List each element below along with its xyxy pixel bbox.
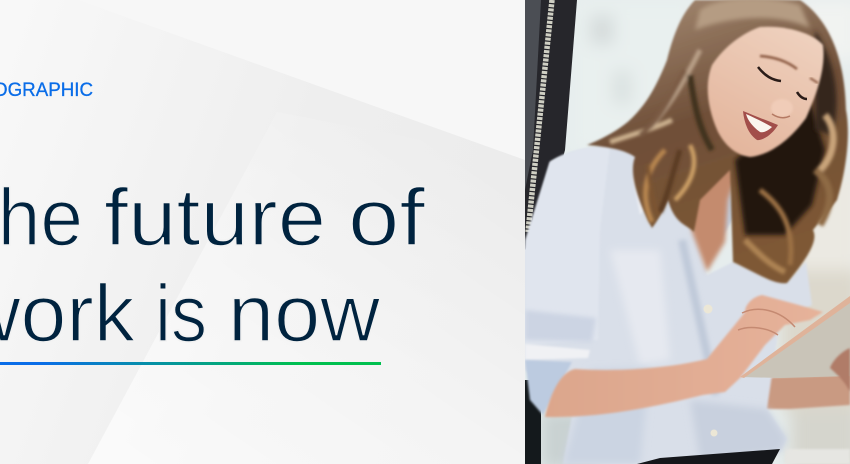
- shirt buttons: [704, 304, 718, 436]
- hair: [587, 0, 848, 283]
- background panel: [0, 0, 525, 464]
- title: [0, 173, 426, 359]
- face: [708, 27, 824, 157]
- title: is: [155, 269, 207, 359]
- title: future: [104, 173, 326, 263]
- back arm: [757, 375, 850, 409]
- tablet: [740, 296, 850, 378]
- photo: woman using a tablet: [524, 0, 850, 464]
- forearm and hand: [545, 295, 823, 417]
- window frame: [524, 0, 577, 464]
- title underline: [0, 362, 381, 365]
- hair highlights: [610, 50, 833, 272]
- neck and chest: [688, 170, 732, 273]
- other hand fingers: [830, 348, 850, 392]
- shirt: [525, 147, 812, 464]
- title: now: [228, 269, 381, 359]
- title: of: [348, 173, 426, 263]
- window background: [525, 0, 850, 464]
- trousers: [637, 449, 780, 464]
